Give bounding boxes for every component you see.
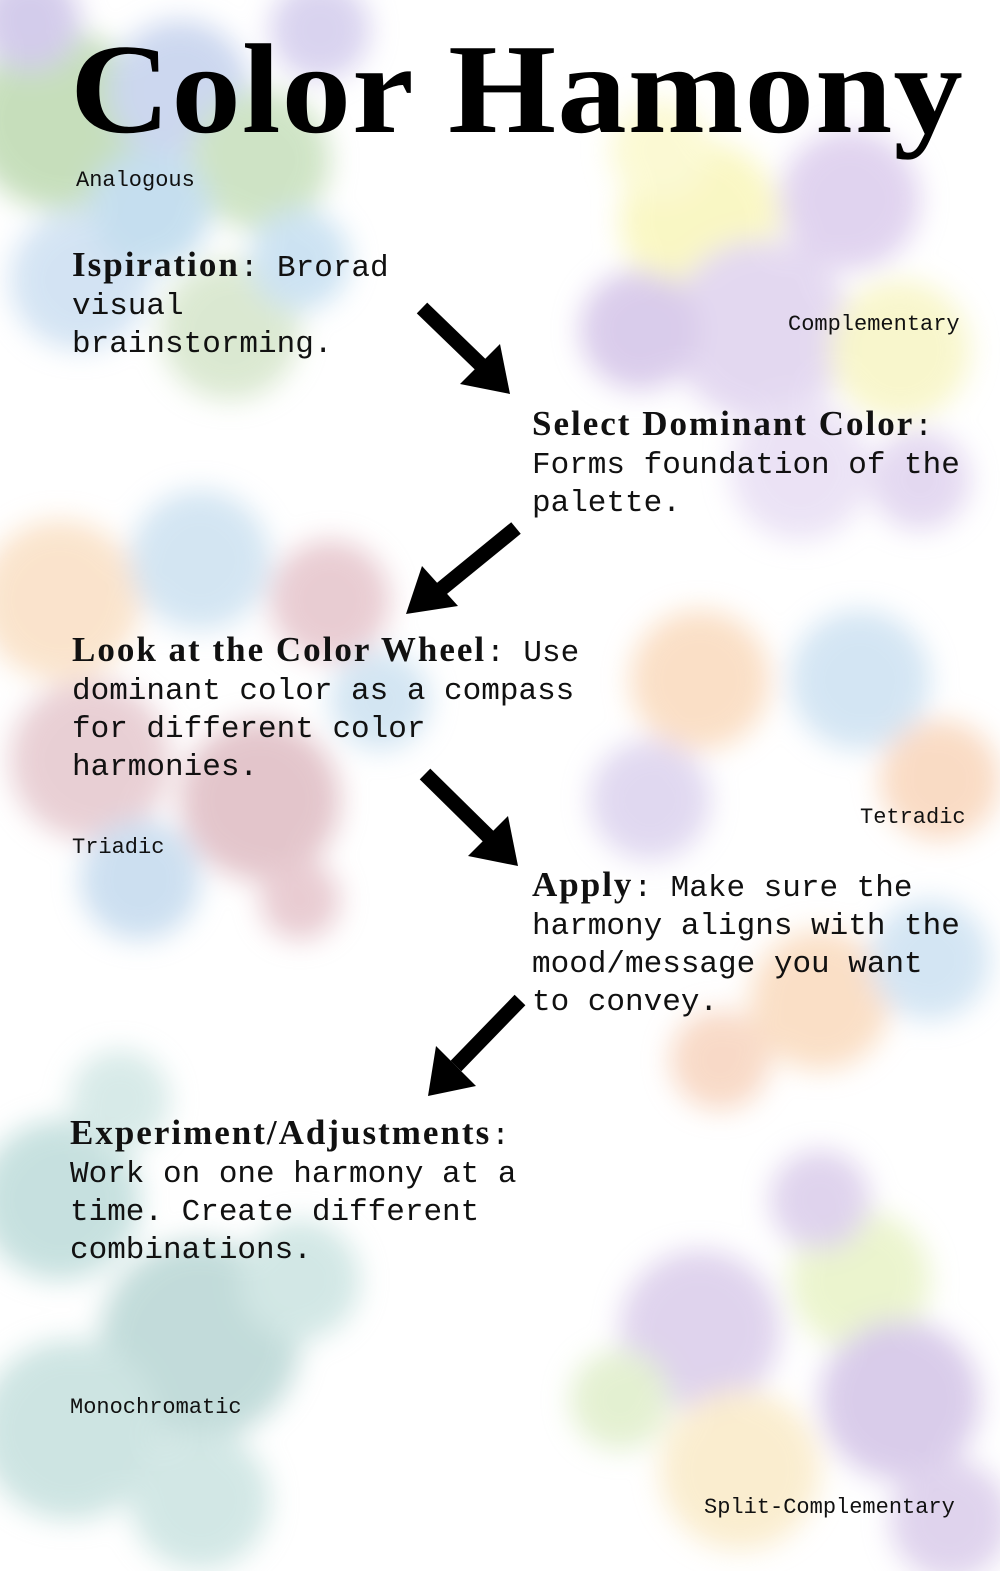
arrow 3 bbox=[425, 774, 518, 866]
label: Complementary: Complementary bbox=[788, 312, 960, 337]
step 2: Select Dominant Color: Select Dominant Color: Forms foundation of the palette. bbox=[532, 404, 960, 521]
step 5: Experiment/Adjustments: Experiment/Adjustments: Work on one harmony at a time. Create different combinations. bbox=[70, 1113, 516, 1268]
arrow 2 bbox=[406, 528, 516, 614]
arrow 1 bbox=[422, 308, 510, 394]
label: Triadic: Triadic bbox=[72, 835, 164, 860]
step 1: Inspiration: Ispiration: Brorad visual brainstorming. bbox=[72, 245, 389, 362]
label: Analogous: Analogous bbox=[76, 168, 195, 193]
arrow 4 bbox=[428, 1000, 520, 1096]
title: Color Hamony bbox=[70, 18, 964, 160]
step 3: Look at the Color Wheel: Look at the Color Wheel: Use dominant color as a compass for different color harmonies. bbox=[72, 630, 579, 785]
label: Split-Complementary: Split-Complementary bbox=[704, 1495, 955, 1520]
step 4: Apply: Apply: Make sure the harmony aligns with the mood/message you want to convey. bbox=[532, 865, 960, 1020]
label: Monochromatic: Monochromatic bbox=[70, 1395, 242, 1420]
label: Tetradic: Tetradic bbox=[860, 805, 966, 830]
